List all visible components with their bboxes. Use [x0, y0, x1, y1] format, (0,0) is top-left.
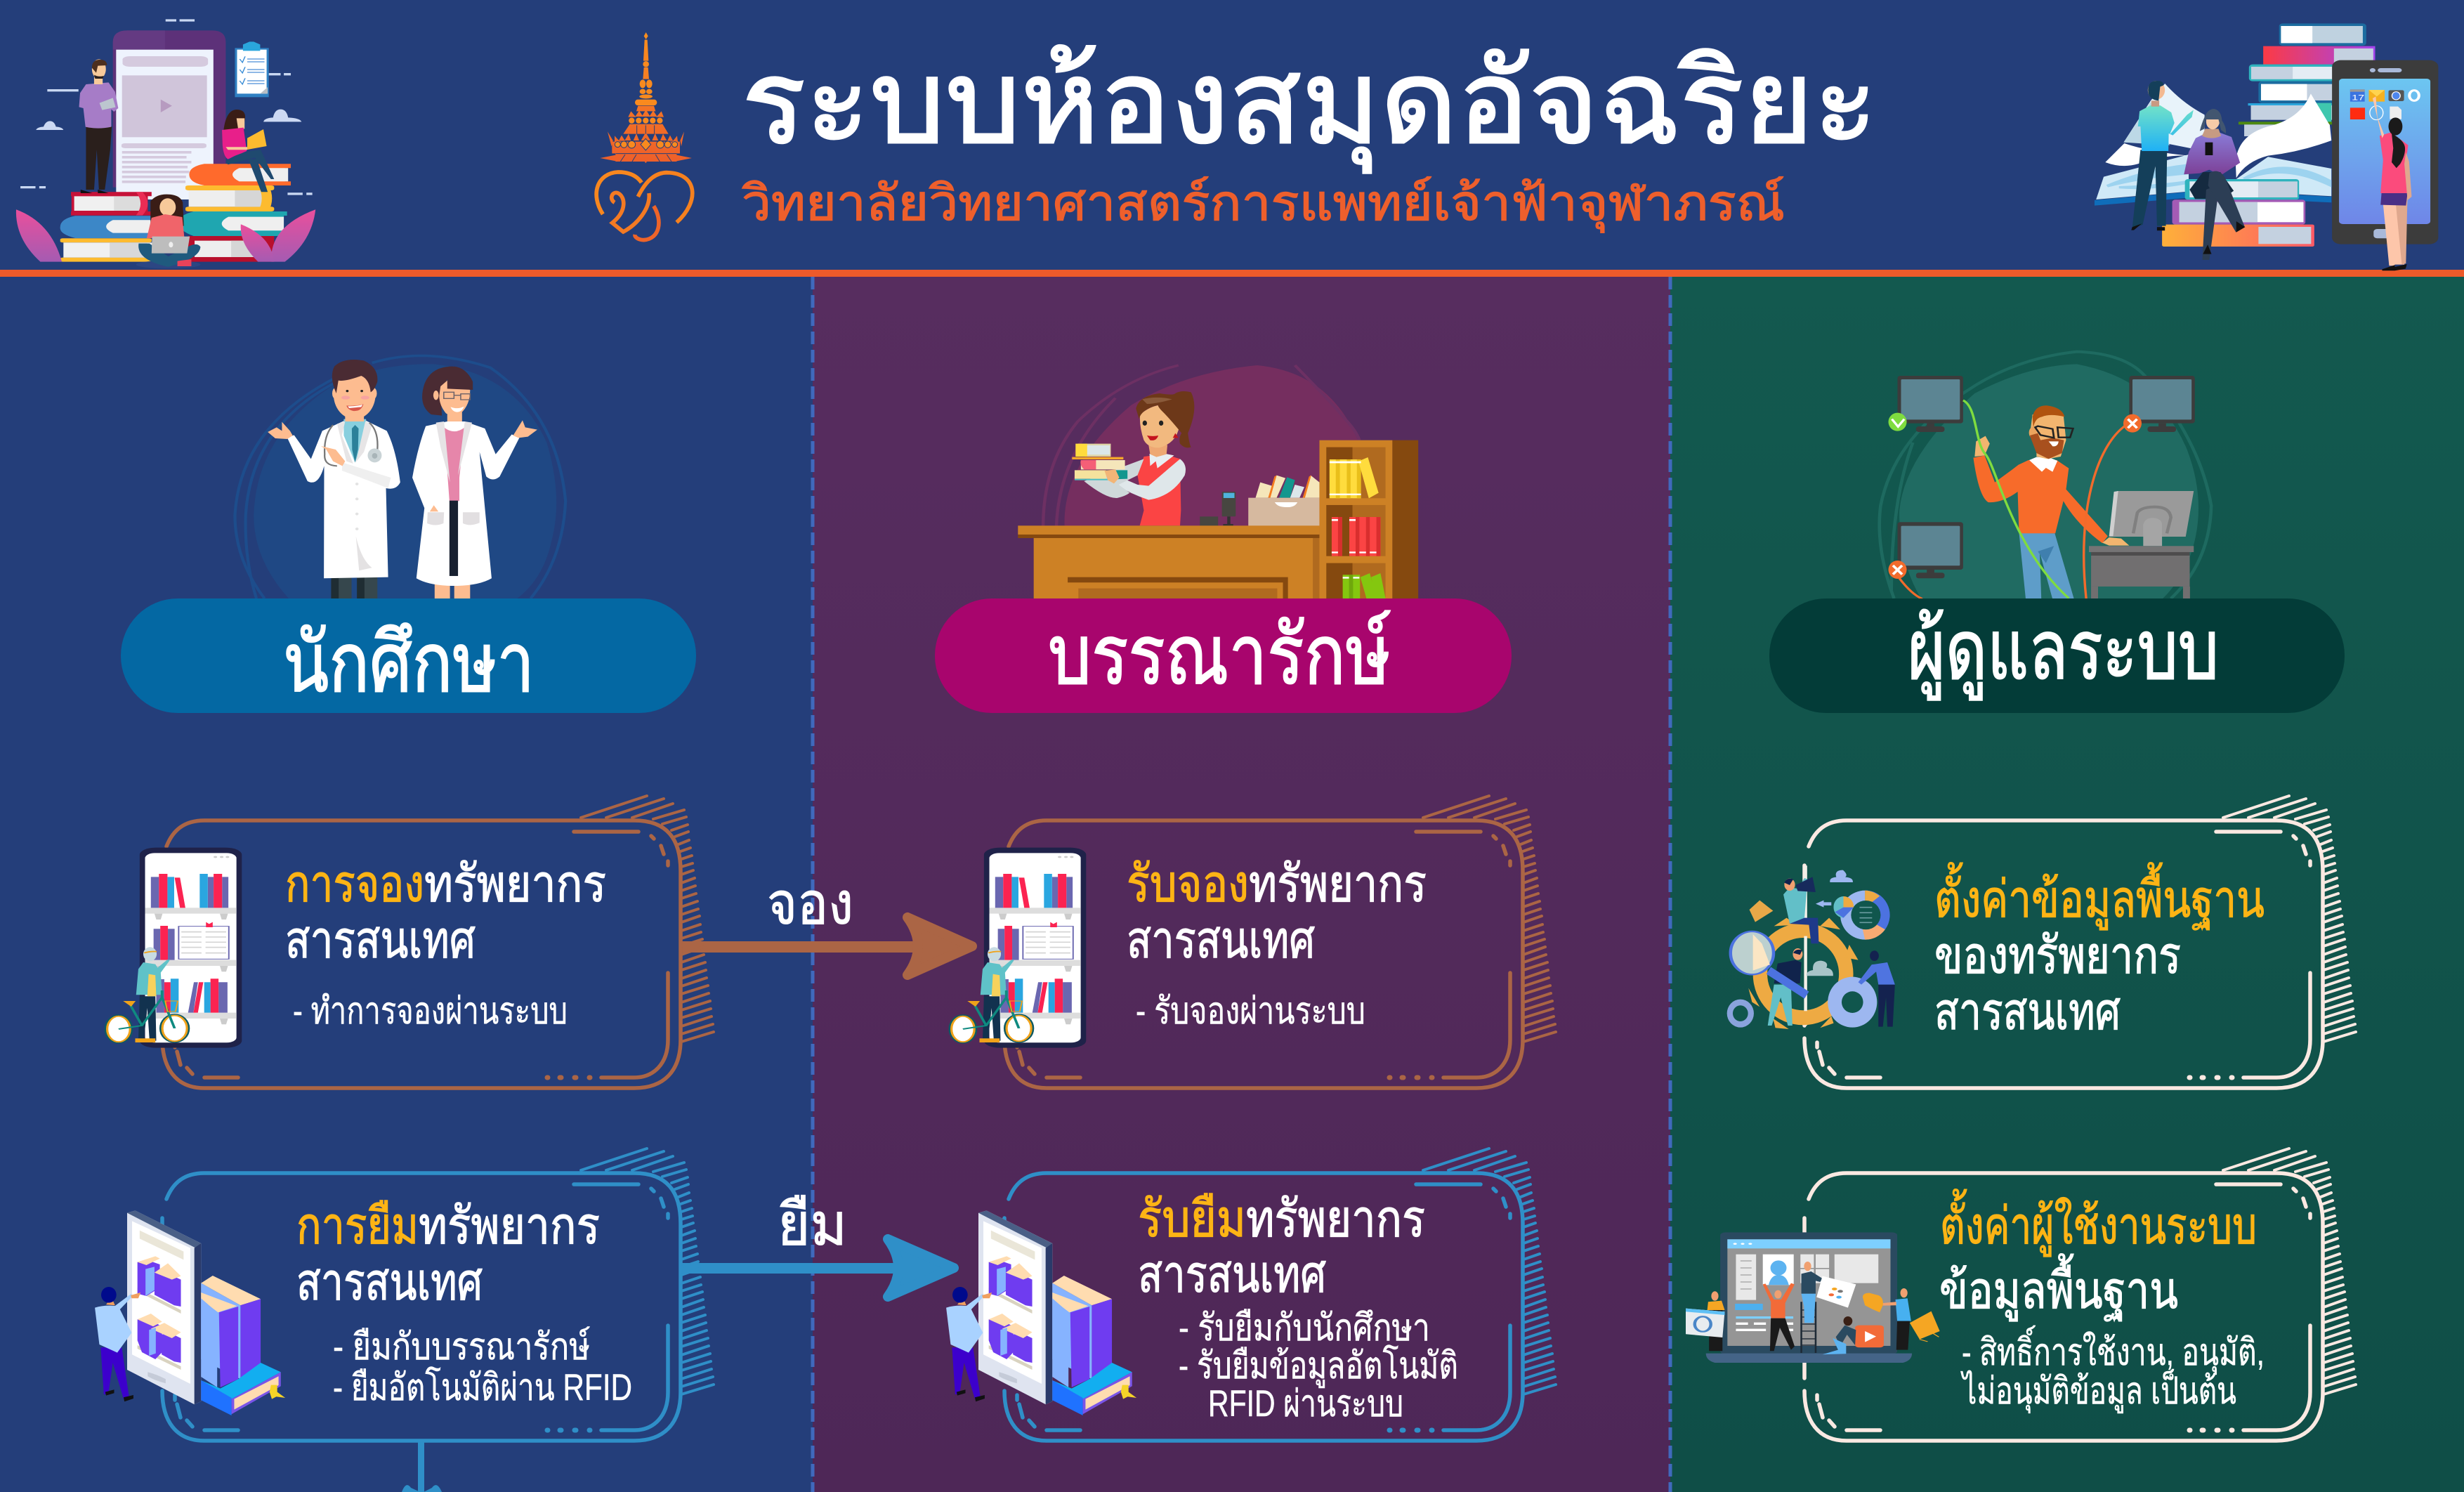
- card: librarian borrowing: สารสนเทศ: [1138, 1246, 1326, 1303]
- card: student reservation: ทรัพยากร: [424, 856, 606, 912]
- icon: team building web page: [1686, 1232, 1940, 1363]
- card: student borrowing: - ยืมกับบรรณารักษ์: [333, 1326, 590, 1368]
- illustration: system administrator: [1880, 352, 2211, 599]
- card: librarian reservation: รับจอง: [1127, 856, 1249, 912]
- card: student borrowing: - ยืมอัตโนมัติผ่าน RFID: [333, 1366, 632, 1408]
- card: user settings: ตั้งค่าผู้ใช้งานระบบ: [1940, 1189, 2257, 1257]
- card: base data settings: ตั้งค่าข้อมูลพื้นฐาน: [1934, 862, 2265, 930]
- card: librarian reservation: - รับจองผ่านระบบ: [1136, 990, 1365, 1032]
- books in box: [1248, 476, 1319, 527]
- card: base data settings: [1727, 796, 2356, 1088]
- heading: system administrator: [1769, 598, 2345, 713]
- illustration: people with open book and phone: [2095, 23, 2438, 270]
- card: librarian borrowing: รับยืม: [1138, 1191, 1246, 1248]
- reception desk: [1018, 525, 1319, 601]
- card: librarian borrowing: ทรัพยากร: [1246, 1191, 1425, 1248]
- emblem: royal crown and cipher: [596, 32, 693, 240]
- illustration: students: [235, 355, 565, 598]
- card: librarian borrowing: RFID ผ่านระบบ: [1208, 1383, 1403, 1425]
- heading: students: นักศึกษา: [283, 617, 535, 709]
- heading: librarian: บรรณารักษ์: [1048, 609, 1391, 702]
- card: librarian reservation: สารสนเทศ: [1127, 912, 1315, 969]
- panel: administrator column background: [1670, 277, 2464, 1492]
- card: librarian borrowing: - รับยืมข้อมูลอัตโนมัติ: [1179, 1344, 1458, 1388]
- card: student borrowing: การยืม: [296, 1198, 419, 1255]
- card: user settings: [1686, 1149, 2356, 1441]
- heading: system administrator: ผู้ดูแลระบบ: [1908, 604, 2219, 700]
- figure: male doctor: [268, 360, 400, 598]
- card: student reservation: - ทำการจองผ่านระบบ: [293, 990, 568, 1032]
- figure: librarian: [1072, 391, 1194, 525]
- card: student borrowing: [95, 1149, 714, 1441]
- illustration: people with open book and phone: 17: [2352, 93, 2364, 102]
- arrow: borrowing: ยืม: [778, 1191, 847, 1257]
- arrow: borrowing: [681, 1191, 954, 1297]
- icon: phone bookshelf with cyclist: [950, 848, 1086, 1048]
- panel: librarian column background: [813, 277, 1670, 1492]
- illustration: librarian at desk: [1018, 365, 1418, 601]
- panel: header: [0, 0, 2464, 277]
- card: student borrowing: สารสนเทศ: [296, 1254, 483, 1311]
- icon: tablet bookshelf with reader: [95, 1210, 285, 1415]
- heading: students: [121, 598, 696, 713]
- figure: female doctor: [412, 367, 537, 598]
- card: librarian reservation: ทรัพยากร: [1249, 856, 1427, 912]
- status badges: [1889, 413, 2142, 579]
- card: student reservation: [105, 796, 714, 1088]
- card: librarian reservation: [950, 796, 1556, 1088]
- arrow: reservation: [681, 870, 972, 975]
- heading: librarian: [935, 598, 1512, 713]
- card: base data settings: สารสนเทศ: [1934, 983, 2121, 1040]
- desk and computer: [2089, 491, 2194, 599]
- icon: team and gears: [1727, 865, 1895, 1029]
- card: base data settings: ของทรัพยากร: [1934, 927, 2181, 984]
- card: librarian borrowing: [946, 1149, 1556, 1441]
- panel: student column background: [0, 277, 813, 1492]
- subtitle: วิทยาลัยวิทยาศาสตร์การแพทย์เจ้าฟ้าจุฬาภรณ์: [742, 176, 1785, 233]
- illustration: people on stacked books: [16, 19, 315, 268]
- title: ระบบห้องสมุดอัจฉริยะ: [742, 38, 1878, 174]
- arrow: downward continuation: [402, 1441, 442, 1492]
- card: student borrowing: ทรัพยากร: [419, 1198, 600, 1255]
- icon: phone bookshelf with cyclist: [105, 848, 242, 1048]
- card: student reservation: การจอง: [285, 856, 424, 912]
- card: user settings: ไม่อนุมัติข้อมูล เป็นต้น: [1960, 1368, 2236, 1413]
- card: user settings: ข้อมูลพื้นฐาน: [1939, 1253, 2178, 1321]
- card: librarian borrowing: - รับยืมกับนักศึกษา: [1179, 1307, 1430, 1349]
- monitors: [1898, 376, 2195, 578]
- figure: technician: [1973, 405, 2129, 599]
- icon: tablet bookshelf with reader: [946, 1210, 1136, 1415]
- bookshelf: [1319, 440, 1418, 601]
- arrow: reservation: จอง: [767, 870, 853, 936]
- card: student reservation: สารสนเทศ: [285, 912, 476, 969]
- card: user settings: - สิทธิ์การใช้งาน, อนุมัติ,: [1962, 1325, 2265, 1375]
